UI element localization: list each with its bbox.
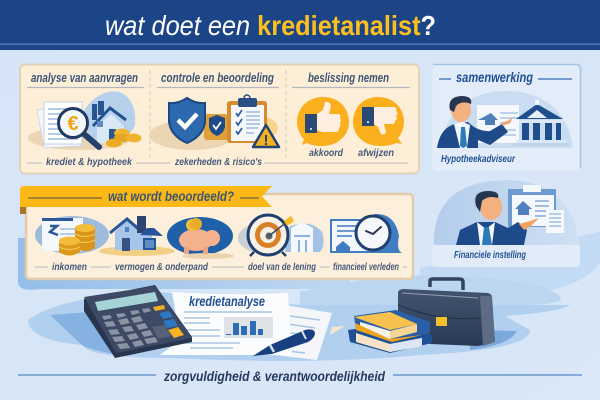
icon: verleden en klok: [331, 214, 402, 253]
icon: rekenmachine: [84, 285, 192, 358]
icon: thumbs up bubble: [297, 97, 349, 146]
icon: shields: [149, 98, 235, 150]
label: Financiele instelling: Financiele instelling: [454, 249, 526, 261]
icon: document, magnifier, house and coins: €: [67, 113, 79, 135]
icon: clipboard with warning: [227, 95, 279, 149]
icon: huis: [99, 216, 175, 256]
title: wat doet een kredietanalist?: [105, 10, 436, 41]
documents: kredietanalyse: [160, 292, 345, 360]
icon: aktentas: [398, 279, 495, 346]
label: vermogen en onderpand: vermogen & onderpand: [115, 261, 208, 273]
label: afwijzen: afwijzen: [358, 147, 394, 159]
icon: document, magnifier, house and coins: [28, 91, 142, 150]
label: Hypotheekadviseur: Hypotheekadviseur: [441, 153, 516, 165]
heading: beslissing nemen: beslissing nemen: [308, 71, 389, 85]
footer line and text: zorgvuldigheid & verantwoordelijkheid: [163, 369, 386, 384]
background: desk shapes: [18, 232, 600, 361]
icon: spaarvarken: [167, 217, 234, 259]
label: inkomen: inkomen: [52, 261, 87, 273]
heading: controle en beoordeling: controle en beoordeling: [161, 71, 274, 85]
label: doel van de lening: doel van de lening: [248, 261, 316, 273]
panel: wat wordt beoordeeld: [20, 186, 413, 279]
heading: kredietanalyse: kredietanalyse: [189, 293, 265, 309]
label: zekerheden en risico's: zekerheden & risico's: [174, 156, 262, 168]
heading: analyse van aanvragen: analyse van aanvragen: [31, 71, 138, 85]
illustration: adviser with bank: [437, 96, 569, 148]
panel: financiele instelling: [432, 180, 580, 267]
heading: samenwerking: samenwerking: [456, 69, 533, 85]
label: akkoord: akkoord: [309, 147, 343, 159]
illustration: banker with documents: [456, 185, 564, 245]
icon: boeken: [348, 310, 432, 353]
banner heading: wat wordt beoordeeld?: [108, 188, 234, 204]
icon: thumbs down bubble: [353, 97, 404, 146]
label: financieel verleden: financieel verleden: [333, 261, 399, 273]
panel: taken: [20, 64, 419, 174]
label: krediet en hypotheek: krediet & hypotheek: [46, 156, 133, 168]
icon: pen: [253, 329, 315, 356]
panel: samenwerking: [432, 64, 580, 170]
icon: doelwit en huis: [238, 215, 324, 256]
icon: inkomen: [35, 216, 109, 256]
icon: clipboard with warning: !: [264, 132, 268, 149]
banner heading: [20, 186, 272, 214]
header bar: [0, 0, 600, 50]
